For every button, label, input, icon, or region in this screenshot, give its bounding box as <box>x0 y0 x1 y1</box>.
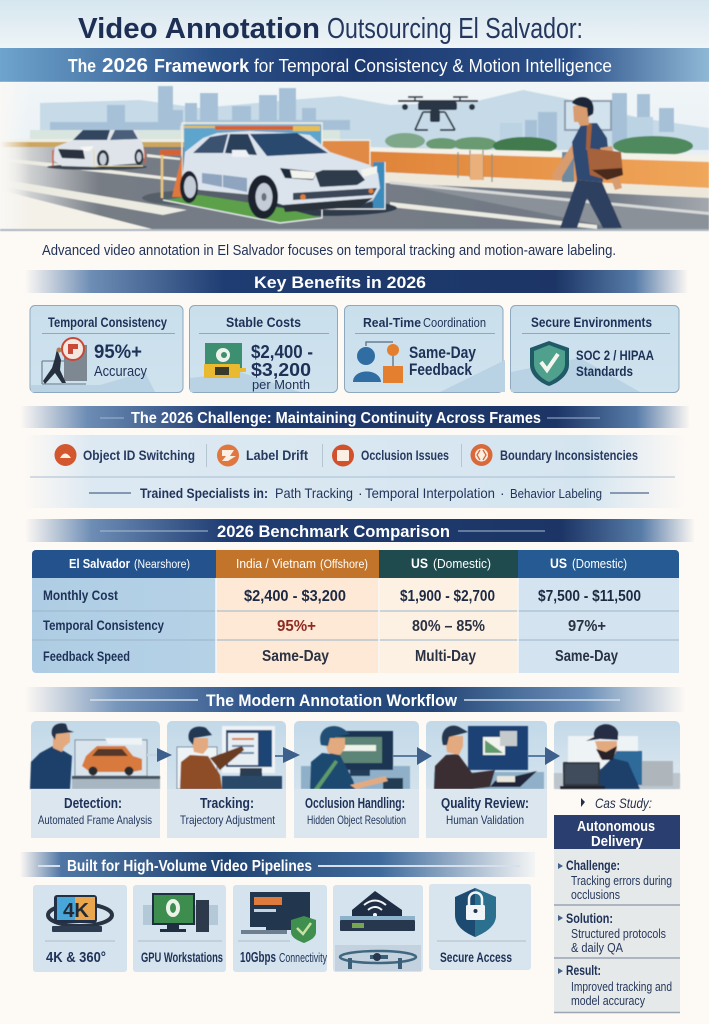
city skyline <box>50 86 674 146</box>
table header: US <box>550 555 567 571</box>
case: result: model accuracy <box>571 993 645 1008</box>
pedestrian <box>553 97 623 228</box>
case: solution: & daily QA <box>571 940 623 955</box>
road shoulder <box>0 190 152 229</box>
section heading: pipelines <box>20 852 535 877</box>
table row: temporal consistency: 95%+ <box>277 618 316 635</box>
table header <box>69 555 627 571</box>
card: real-time coordination: Same-Day <box>409 343 476 362</box>
card: real-time coordination: Real-Time <box>363 315 421 330</box>
step: detection: Detection: <box>64 796 122 812</box>
panel: case study <box>554 815 680 1012</box>
road markings <box>0 154 709 229</box>
horizon <box>30 130 340 139</box>
table header: (Nearshore) <box>134 559 190 571</box>
section heading: key benefits <box>25 270 688 293</box>
icon: shield check <box>530 341 569 386</box>
table row: temporal consistency <box>43 617 606 635</box>
step: case study photo <box>554 721 680 789</box>
trained specialists line: · <box>500 485 505 501</box>
arrow: occlusion to quality <box>393 747 432 765</box>
panel: pipeline cards <box>33 884 531 972</box>
card: temporal consistency: Accuracy <box>94 363 147 380</box>
case: challenge: Challenge: <box>566 858 620 873</box>
icon: object id switching <box>54 444 76 466</box>
mountains <box>40 90 709 150</box>
subtitle band <box>0 48 709 82</box>
table row: feedback speed: Same-Day <box>555 648 618 665</box>
card: real-time coordination <box>344 306 505 392</box>
card: 10Gbps connectivity: 10Gbps <box>240 950 276 966</box>
step: detection: Automated Frame Analysis <box>38 813 152 827</box>
card: secure environments: Secure Environments <box>531 315 652 330</box>
section heading: workflow <box>25 687 685 712</box>
panel: challenges: Object ID Switching <box>83 447 195 463</box>
card: temporal consistency <box>30 306 183 392</box>
panel: challenges: Boundary Inconsistencies <box>500 447 638 463</box>
subtitle band: 2026 <box>102 55 148 77</box>
panel: challenges <box>25 435 685 508</box>
table row: temporal consistency: Temporal Consistency <box>43 617 164 633</box>
small car <box>47 130 147 170</box>
arrow: tracking to occlusion <box>275 747 300 763</box>
section heading: the 2026 challenge <box>20 406 690 428</box>
drone <box>398 97 478 130</box>
case: challenge: Tracking errors during <box>571 873 672 888</box>
section heading: workflow: The Modern Annotation Workflow <box>206 691 458 710</box>
subtitle band: The <box>68 56 96 76</box>
icon: boundary inconsistencies <box>470 444 492 466</box>
intro text: Advanced video annotation in El Salvador focuses on temporal tracking and motion-aware labeling. <box>42 242 616 259</box>
step: quality review <box>426 721 547 838</box>
card: 10Gbps connectivity <box>233 885 328 972</box>
card: secure access: Secure Access <box>440 949 512 965</box>
table row: feedback speed <box>43 648 618 665</box>
step: detection <box>30 721 160 838</box>
panel: challenges: Occlusion Issues <box>361 447 449 463</box>
benchmark table <box>32 550 679 673</box>
subtitle band: Framework <box>154 56 250 76</box>
trained specialists line: Path Tracking <box>275 485 353 501</box>
card: secure access <box>429 884 531 970</box>
table header: El Salvador <box>69 556 130 571</box>
step: occlusion handling <box>294 721 419 838</box>
road <box>0 147 709 229</box>
card: temporal consistency: Temporal Consistency <box>48 315 167 330</box>
panel: case study: Delivery <box>591 834 643 850</box>
icon: label drift <box>217 444 239 466</box>
section heading: benchmark comparison <box>25 519 695 542</box>
step: occlusion handling: Hidden Object Resolution <box>307 813 406 827</box>
panel: workflow <box>30 721 680 838</box>
section heading: key benefits: Key Benefits in 2026 <box>254 273 426 292</box>
card: stable costs: $3,200 <box>251 359 311 380</box>
card: real-time coordination: Coordination <box>423 315 486 330</box>
table row: monthly cost: $2,400 - $3,200 <box>244 588 346 605</box>
card: stable costs <box>190 306 338 392</box>
table header: India / Vietnam <box>236 557 316 571</box>
subtitle band: for Temporal Consistency & Motion Intelligence <box>254 56 612 76</box>
trained specialists line: Trained Specialists in: <box>140 485 268 501</box>
card: temporal consistency: 95%+ <box>94 342 142 363</box>
card: stable costs: per Month <box>252 378 310 392</box>
bushes <box>385 133 693 156</box>
icon: cash <box>204 343 246 378</box>
trained specialists line <box>140 485 602 501</box>
section heading: benchmark comparison: 2026 Benchmark Comparison <box>217 522 450 541</box>
card: real-time coordination: Feedback <box>409 360 472 379</box>
case: result <box>558 963 672 1008</box>
card: stable costs: $2,400 - <box>251 341 313 362</box>
table row: monthly cost: Monthly Cost <box>43 587 118 603</box>
title: Video Annotation <box>78 13 320 45</box>
table header: (Domestic) <box>572 556 627 571</box>
card: 4K and 360 <box>33 885 127 972</box>
title: Outsourcing El Salvador: <box>327 13 583 45</box>
card: GPU workstations: GPU Workstations <box>141 950 223 965</box>
table row: monthly cost: $1,900 - $2,700 <box>400 588 495 605</box>
card: 10Gbps connectivity: Connectivity <box>279 951 328 965</box>
trained specialists line: · <box>358 485 363 501</box>
case: solution: Structured protocols <box>571 926 666 941</box>
case study heading <box>581 795 652 811</box>
table row: monthly cost: $7,500 - $11,500 <box>538 588 641 605</box>
icon: person and box <box>353 342 403 383</box>
card: stable costs: Stable Costs <box>226 314 301 330</box>
card: secure environments: Standards <box>576 363 633 379</box>
trained specialists line: Behavior Labeling <box>510 486 602 501</box>
table header: (Domestic) <box>433 556 491 571</box>
billboard behind person <box>565 101 611 130</box>
trained specialists line: Temporal Interpolation <box>365 485 495 501</box>
step: quality review: Quality Review: <box>441 796 529 812</box>
case: challenge <box>558 858 672 902</box>
step: tracking: Trajectory Adjustment <box>180 813 276 827</box>
table row: feedback speed: Feedback Speed <box>43 648 130 664</box>
case study heading: Cas Study: <box>595 795 652 811</box>
table row: temporal consistency: 97%+ <box>568 618 606 635</box>
card: 4K and 360: 4K <box>63 900 90 922</box>
panel: challenges: Label Drift <box>246 447 308 463</box>
case: result: Result: <box>566 963 601 978</box>
icon: worker at board <box>42 338 87 384</box>
case: solution: Solution: <box>566 911 613 926</box>
panel: case study: Autonomous <box>577 819 655 835</box>
title <box>78 13 583 45</box>
table row: monthly cost <box>43 587 641 605</box>
card: 4K and 360: 4K & 360° <box>46 949 106 966</box>
card: GPU workstations <box>133 885 226 972</box>
icon: occlusion issues <box>332 444 354 466</box>
step: quality review: Human Validation <box>446 813 524 827</box>
section heading: pipelines: Built for High-Volume Video Pipelines <box>67 858 312 875</box>
card: secure environments <box>510 306 679 392</box>
hero illustration <box>0 82 709 231</box>
table row: feedback speed: Same-Day <box>262 648 329 665</box>
card: secure environments: SOC 2 / HIPAA <box>576 347 654 363</box>
step: occlusion handling: Occlusion Handling: <box>305 796 405 812</box>
case: challenge: occlusions <box>571 887 620 902</box>
orange barrier <box>322 146 709 163</box>
step: tracking <box>167 721 286 838</box>
panel: key benefits cards <box>30 306 679 392</box>
table header: US <box>411 555 428 571</box>
case: solution <box>558 911 666 955</box>
section heading: the 2026 challenge: The 2026 Challenge: Maintaining Continuity Across Frames <box>131 410 541 427</box>
table row: temporal consistency: 80% – 85% <box>412 618 485 635</box>
table row: feedback speed: Multi-Day <box>415 648 476 665</box>
table header: (Offshore) <box>320 559 368 571</box>
arrow: quality to case study <box>528 747 560 765</box>
case: result: Improved tracking and <box>571 979 672 994</box>
arrow: detection to tracking <box>147 748 172 762</box>
step: tracking: Tracking: <box>200 796 254 812</box>
card: router and drone <box>333 885 423 972</box>
large car with bounding boxes <box>142 123 397 223</box>
